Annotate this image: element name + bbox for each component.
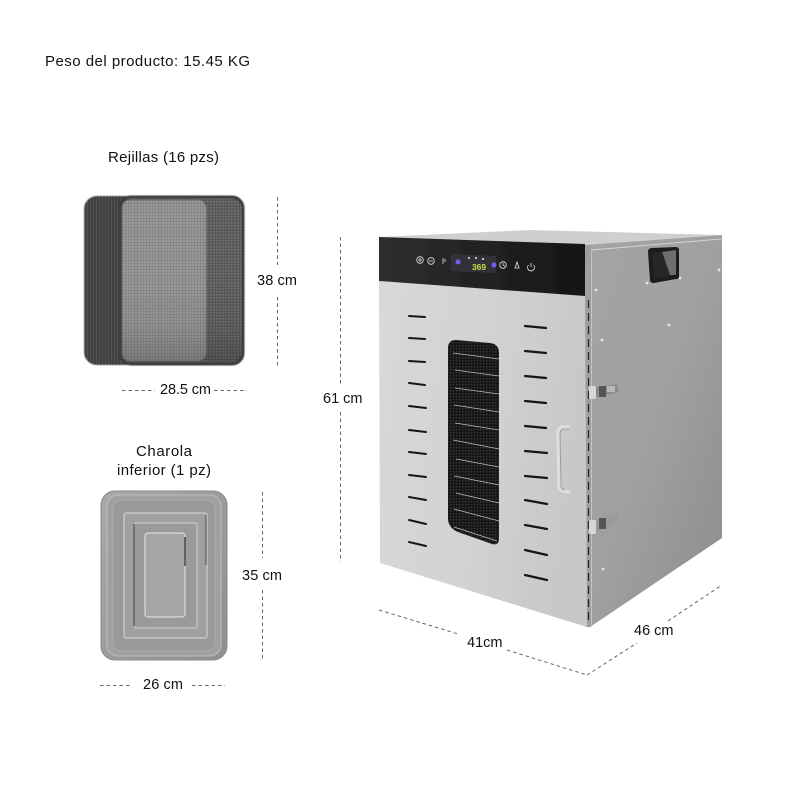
heading: Charola inferior: inferior (1 pz) <box>117 462 211 479</box>
dimension: tray height: 35 cm <box>242 568 282 584</box>
dimension: machine width <box>379 610 587 675</box>
control panel <box>417 254 535 273</box>
dehydrator machine <box>379 230 722 627</box>
control panel: 369 <box>472 263 487 272</box>
black control band <box>379 237 585 296</box>
heading: Charola inferior <box>117 443 211 479</box>
door handle <box>558 427 570 492</box>
dimension: machine depth <box>587 585 722 675</box>
heading: Rejillas: Rejillas (16 pzs) <box>108 149 219 166</box>
top panel <box>379 230 722 245</box>
window <box>448 340 499 544</box>
dimension: rack width: 28.5 cm <box>160 382 211 398</box>
icon: stack of mesh racks <box>84 196 243 365</box>
vent slots left <box>409 316 426 546</box>
heading: Charola inferior: Charola <box>136 443 193 460</box>
dimension: machine width: 41cm <box>467 635 502 651</box>
icon: bottom tray <box>101 491 227 660</box>
dimension: rack height: 38 cm <box>257 273 297 289</box>
front door <box>379 281 587 627</box>
weight text: Peso del producto: 15.45 KG <box>45 53 250 70</box>
dimension: tray width <box>100 677 225 693</box>
side handle <box>648 247 679 283</box>
dimension: tray width: 26 cm <box>143 677 183 693</box>
dimension: rack width <box>122 382 247 398</box>
vent slots right <box>525 326 547 580</box>
side panel <box>585 235 722 627</box>
latch upper <box>589 384 619 399</box>
dimension: machine depth: 46 cm <box>634 623 674 639</box>
dimension: machine height: 61 cm <box>323 391 362 407</box>
latch lower <box>589 513 617 534</box>
